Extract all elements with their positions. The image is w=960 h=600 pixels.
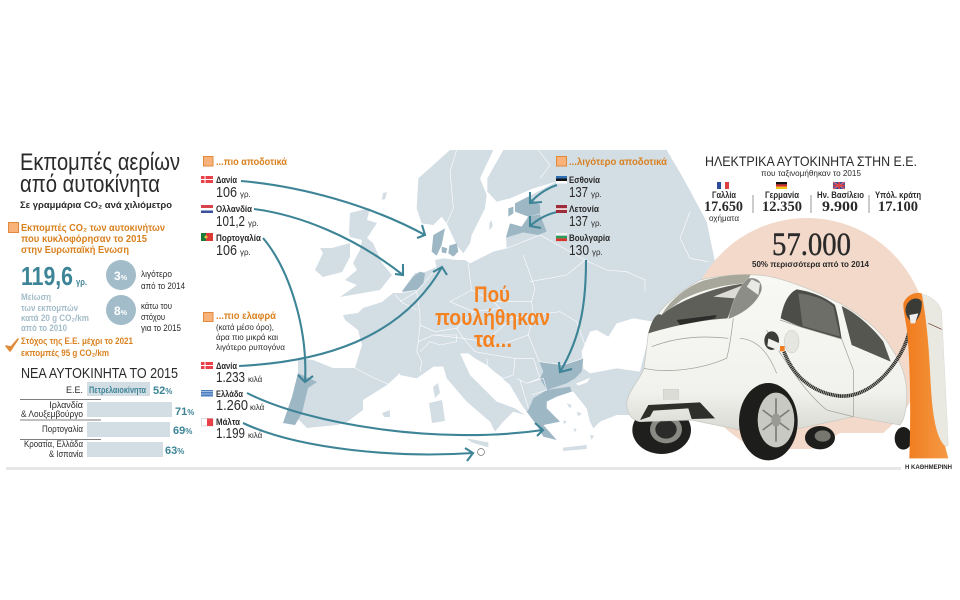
subtitle: Σε γραμμάρια CO₂ ανά χιλιόμετρο [20, 200, 172, 211]
Germany figure: Γερμανία [765, 190, 799, 200]
panel: least efficient: Βουλγαρία [569, 233, 610, 243]
panel: lightest cars: (κατά μέσο όρο), [216, 322, 274, 332]
panel: least efficient: γρ. [592, 248, 603, 257]
charger orange front [903, 293, 948, 458]
flag: Bulgaria [556, 233, 567, 241]
target note [21, 336, 134, 359]
arrow: Bulgaria [559, 260, 586, 372]
circle stat 3%: 3% [114, 269, 128, 283]
western borders [355, 290, 417, 385]
Netherlands highlighted [402, 272, 425, 292]
panel: lightest cars: Ελλάδα [216, 389, 243, 399]
panel: least efficient: γρ. [591, 219, 602, 228]
other states figure [875, 190, 921, 215]
panel: lightest cars: 1.233 [216, 369, 245, 386]
footer rule [6, 467, 901, 470]
plug [767, 338, 783, 352]
panel: lightest cars: Μάλτα [216, 417, 240, 427]
Germany figure [762, 182, 802, 215]
spoiler [662, 275, 751, 315]
panel: most efficient: γρ. [240, 248, 251, 257]
rear window [648, 283, 746, 333]
tail light lens [747, 279, 760, 295]
wheel: rear left [632, 406, 691, 454]
window highlight [713, 285, 743, 298]
arrow: Portugal [263, 238, 313, 382]
charging port [764, 331, 779, 350]
heading: new cars: ΝΕΑ ΑΥΤΟΚΙΝΗΤΑ ΤΟ 2015 [21, 365, 178, 382]
panel: most efficient: 101,2 [216, 213, 245, 230]
country borders east [400, 150, 708, 408]
circle stat 8%: κάτω του [141, 301, 172, 311]
circle stat 3%: από το 2014 [141, 281, 185, 291]
white under car [700, 433, 905, 466]
circle stat 8% [106, 295, 181, 333]
arrow: Denmark emissions [241, 181, 425, 238]
Sea of Marmara [576, 378, 590, 386]
rear hub [771, 413, 781, 427]
EU emissions heading: που κυκλοφόρησαν το 2015 [21, 234, 147, 245]
panel: lightest cars: κιλά [250, 403, 265, 412]
flag: Denmark [201, 362, 213, 369]
UK figure: 9.900 [822, 199, 858, 215]
panel: most efficient: ...πιο αποδοτικά [216, 157, 288, 168]
tail light [728, 278, 762, 319]
row: Ireland and Luxembourg: Ιρλανδία [49, 400, 83, 410]
key figure 119,6: 119,6 [21, 261, 73, 291]
map caption: πουλήθηκαν [435, 305, 550, 330]
row: EU: Ε.Ε. [66, 385, 83, 395]
row: EU [66, 382, 172, 397]
car body [627, 275, 907, 430]
row: Croatia, Greece, Spain: Κροατία, Ελλάδα [24, 439, 83, 449]
Norway and Sweden [417, 150, 493, 253]
other states figure: Υπόλ. κράτη [875, 190, 921, 200]
arrow: Estonia [530, 185, 557, 203]
France figure: 17.650 [704, 199, 743, 215]
circle stat 3% [106, 260, 185, 291]
flag: Malta [202, 418, 213, 426]
rear rim spokes [763, 398, 789, 442]
rear tyre [739, 383, 798, 460]
credit: Η ΚΑΘΗΜΕΡΙΝΗ [905, 464, 952, 471]
panel: most efficient: 106 [216, 184, 237, 201]
panel: lightest cars: 1.199 [216, 425, 245, 442]
panel: least efficient: Εσθονία [569, 175, 600, 185]
target note: Στόχος της Ε.Ε. μέχρι το 2021 [21, 336, 134, 347]
icon: check mark [6, 339, 18, 351]
panel: least efficient: 137 [569, 184, 588, 201]
target note: εκπομπές 95 g CO₂/km [21, 348, 109, 359]
Latvia highlighted [506, 214, 547, 238]
circle stat 8%: για το 2015 [141, 323, 181, 333]
panel: most efficient [201, 156, 288, 259]
row: Portugal [42, 422, 192, 437]
map of Europe [283, 150, 720, 451]
row: EU: Πετρελαιοκίνητα [89, 385, 146, 395]
flap [784, 330, 799, 353]
row: Croatia, Greece, Spain: 63% [165, 445, 184, 457]
row: Ireland and Luxembourg [21, 400, 194, 419]
reduction note: κατά 20 g CO₂/km [21, 313, 89, 324]
row: Portugal: Πορτογαλία [42, 424, 83, 434]
charger plug [909, 313, 918, 323]
row: Ireland and Luxembourg: 71% [175, 406, 194, 418]
Gotland [489, 220, 493, 230]
panel: most efficient: γρ. [240, 190, 251, 199]
electric car illustration [627, 275, 948, 460]
panel: lightest cars: άρα πιο μικρά και [216, 332, 278, 342]
panel: most efficient: Πορτογαλία [216, 233, 261, 243]
panel: lightest cars: ...πιο ελαφρά [216, 311, 277, 322]
Shetland [382, 192, 387, 200]
France figure: οχήματα [709, 213, 739, 223]
France figure [704, 182, 743, 223]
peach circle behind car [686, 218, 928, 460]
arrow: Greece [247, 393, 543, 436]
heading: electric cars: που ταξινομήθηκαν το 2015 [761, 169, 862, 178]
Black Sea [582, 318, 653, 373]
map caption: Πού [474, 282, 510, 307]
rear door window [781, 289, 842, 339]
hatch outline [644, 318, 853, 417]
reduction note: των εκπομπών [21, 303, 78, 314]
bar chart: diesel share [20, 382, 194, 459]
Great Britain [340, 208, 392, 297]
Aegean islands [563, 403, 594, 440]
panel: lightest cars: κιλά [248, 375, 263, 384]
title [20, 149, 180, 198]
Crete [563, 445, 587, 451]
orange legend square [8, 222, 18, 232]
flag: Portugal [201, 233, 213, 241]
row: Ireland and Luxembourg: & Λουξεμβούργο [21, 409, 83, 419]
Germany figure: 12.350 [762, 199, 802, 215]
wheel: far front [805, 426, 835, 449]
arrow: Malta [243, 423, 473, 461]
panel: least efficient: 130 [569, 242, 589, 259]
circle stat 3%: λιγότερο [141, 269, 172, 279]
charging cable [784, 327, 910, 396]
key figure 119,6: γρ. [76, 277, 87, 287]
Sardinia [429, 400, 445, 423]
title: από αυτοκίνητα [20, 171, 160, 198]
total figure 57.000: 57.000 [772, 227, 851, 263]
arrow: Latvia [530, 212, 557, 228]
total note: 50% περισσότερα από το 2014 [752, 259, 869, 269]
western Europe [283, 267, 460, 428]
flag: Denmark [201, 176, 213, 183]
bumper vent [640, 402, 715, 420]
circle stat 8%: στόχου [141, 312, 165, 322]
row: Croatia, Greece, Spain [24, 439, 184, 459]
charger socket [905, 299, 922, 323]
Sicily [467, 438, 488, 447]
wheel: front right [895, 427, 912, 450]
other states figure: 17.100 [878, 199, 918, 215]
panel: most efficient: Ολλανδία [216, 204, 252, 214]
Denmark highlighted [432, 228, 458, 257]
rear rim [758, 393, 794, 447]
panel: lightest cars: λιγότερο ρυπογόνα [216, 342, 285, 352]
wiper [677, 315, 717, 325]
Bulgaria highlighted [539, 358, 583, 390]
EU emissions heading [21, 223, 165, 256]
France figure: Γαλλία [712, 190, 736, 200]
Corsica [433, 383, 440, 398]
central and eastern Europe [400, 150, 720, 451]
row: Croatia, Greece, Spain: & Ισπανία [49, 449, 83, 459]
Balearic islands [382, 410, 390, 417]
flag: Greece [201, 390, 213, 397]
circle stat 8%: 8% [114, 304, 128, 318]
flag: Netherlands [201, 205, 213, 213]
panel: least efficient: 137 [569, 213, 588, 230]
flag: Latvia [556, 205, 567, 213]
plug tip [780, 346, 785, 351]
map caption: τα... [474, 327, 512, 352]
arrow: Denmark weight [239, 267, 447, 366]
reduction note [21, 292, 89, 334]
panel: least efficient: ...λιγότερο αποδοτικά [569, 157, 668, 168]
Estonia highlighted [515, 197, 540, 217]
Portugal highlighted [283, 373, 317, 425]
EU emissions heading: στην Ευρωπαϊκή Ενωση [21, 245, 129, 256]
Malta marker [478, 449, 484, 455]
UK figure [817, 182, 864, 215]
panel: most efficient: 106 [216, 242, 237, 259]
charger white back [922, 294, 948, 447]
panel: least efficient: γρ. [591, 190, 602, 199]
window tone [798, 293, 840, 337]
Greece highlighted [527, 387, 572, 440]
title: Εκπομπές αερίων [20, 149, 180, 176]
panel: least efficient: Λετονία [569, 204, 599, 214]
Saaremaa [508, 207, 513, 217]
reduction note: από το 2010 [21, 323, 67, 334]
front door window [842, 306, 891, 362]
Ireland [315, 243, 350, 277]
panel: most efficient: γρ. [248, 219, 259, 228]
EU emissions heading: Εκπομπές CO₂ των αυτοκινήτων [21, 223, 165, 234]
panel: least efficient [556, 156, 668, 259]
map caption [435, 282, 550, 352]
flag: Estonia [556, 176, 567, 184]
arrow: Netherlands [254, 209, 403, 275]
panel: lightest cars: κιλά [248, 431, 263, 440]
charger line [928, 323, 942, 329]
reduction note: Μείωση [21, 292, 51, 303]
heading: electric cars [705, 153, 917, 178]
heading: electric cars: ΗΛΕΚΤΡΙΚΑ ΑΥΤΟΚΙΝΗΤΑ ΣΤΗΝ Ε.Ε. [705, 153, 917, 169]
panel: lightest cars [201, 311, 285, 442]
row: Portugal: 69% [173, 425, 192, 437]
UK figure: Ην. Βασίλειο [817, 190, 864, 200]
panel: lightest cars: 1.260 [216, 397, 248, 414]
row: EU: 52% [153, 385, 172, 397]
license reflector [663, 389, 679, 399]
panel: most efficient: Δανία [216, 175, 237, 185]
panel: lightest cars: Δανία [216, 361, 237, 371]
